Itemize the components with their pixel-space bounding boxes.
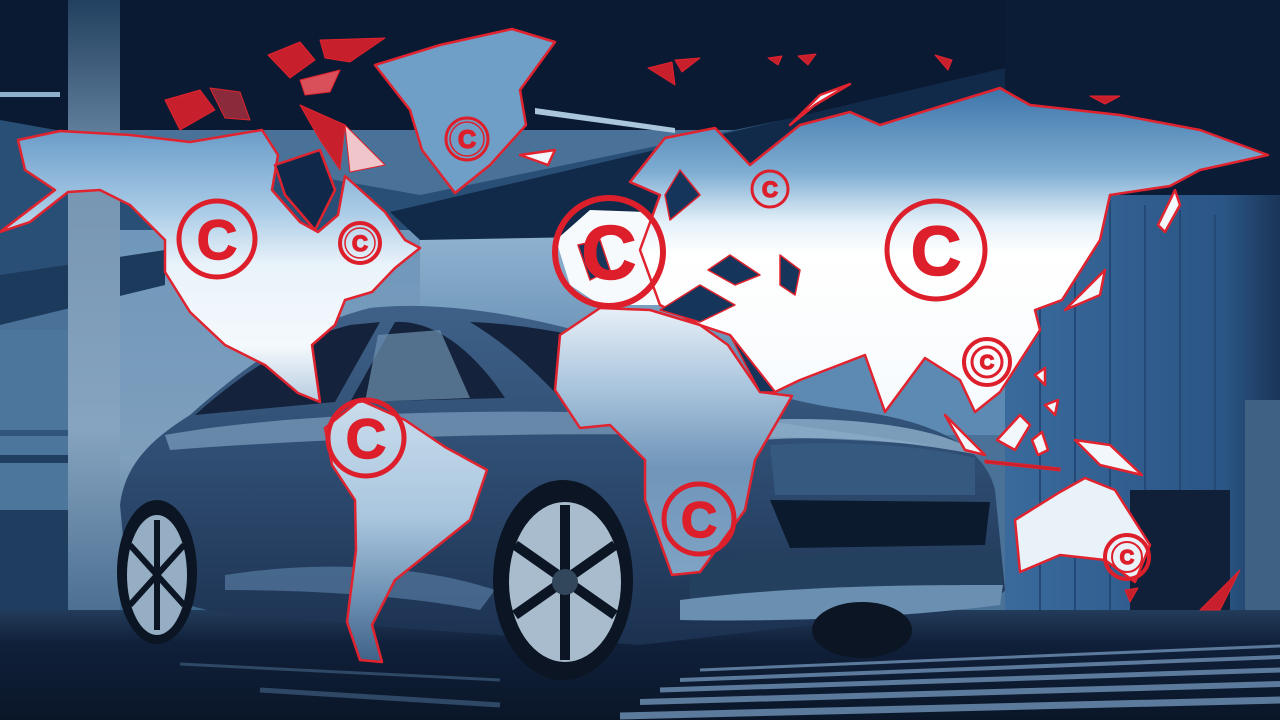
- corrugated wall lines: [1040, 200, 1215, 615]
- copyright symbols: [179, 118, 1149, 579]
- wheel: rear: [117, 500, 197, 644]
- continent: Eurasia: [630, 88, 1268, 412]
- symbol: South America: C: [346, 407, 386, 470]
- symbol: North America: [179, 201, 255, 277]
- symbol: Asia: C: [911, 212, 961, 290]
- symbol: Africa: C: [681, 492, 717, 548]
- symbol: Australia: [1105, 535, 1149, 579]
- car grille: [770, 500, 990, 548]
- symbol: Europe: [555, 198, 663, 306]
- symbol: Asia: [887, 201, 985, 299]
- car light reflections: [165, 412, 930, 450]
- symbol: North America: C: [197, 208, 237, 271]
- symbol: Greenland: [446, 118, 488, 160]
- continent: Australia: [1015, 478, 1150, 582]
- symbol: Greenland: C: [458, 126, 476, 154]
- continent: North America: [0, 130, 420, 402]
- continent: Africa: [555, 308, 792, 575]
- symbol: South East Asia: [964, 339, 1010, 385]
- islands: [520, 84, 1180, 475]
- continent: Greenland: [375, 29, 555, 193]
- wheel: front: [493, 480, 633, 680]
- continent: western Europe: [556, 210, 680, 305]
- symbol: South East Asia: C: [980, 352, 994, 374]
- car body: [120, 306, 1005, 645]
- symbol: South America: [328, 400, 404, 476]
- symbol: eastern US: [340, 223, 380, 263]
- continent: South America: [325, 400, 487, 662]
- symbol: Russia: [752, 171, 788, 207]
- symbol: Australia: C: [1120, 547, 1134, 569]
- symbol: Russia: C: [762, 177, 778, 202]
- car: [117, 306, 1005, 680]
- arctic islands: [165, 38, 1240, 610]
- car windows: [195, 322, 745, 415]
- inland seas: [578, 170, 800, 392]
- floor: [0, 610, 1280, 720]
- symbol: Europe: C: [582, 211, 636, 296]
- wheel: far front: [812, 602, 912, 658]
- symbol: Africa: [664, 484, 734, 554]
- Hudson bay: [275, 150, 335, 230]
- symbol: eastern US: C: [352, 231, 368, 256]
